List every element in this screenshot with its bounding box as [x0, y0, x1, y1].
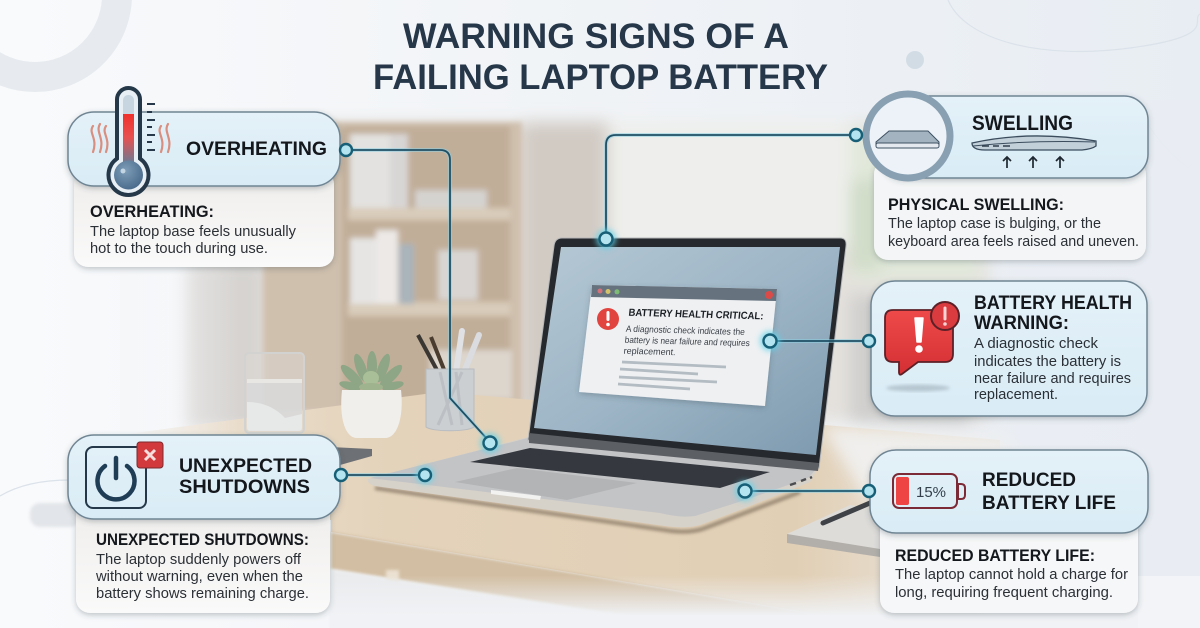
shutdowns description: without warning, even when the [95, 569, 303, 585]
reduced life header label: BATTERY LIFE [982, 492, 1116, 514]
swelling description: The laptop case is bulging, or the [888, 216, 1101, 232]
panel: swelling [866, 94, 1148, 260]
swelling header [880, 96, 1148, 178]
window text: A diagnostic check indicates the [625, 324, 745, 337]
window text: BATTERY HEALTH CRITICAL: [628, 308, 764, 322]
decorative corner ring [0, 0, 117, 77]
window placeholder lines [618, 362, 726, 389]
battery health description: replacement. [974, 387, 1058, 403]
icon: red x badge [137, 442, 163, 468]
icon: warning speech bubble [885, 302, 959, 392]
icon: thermometer [108, 88, 155, 195]
connector lines [346, 135, 864, 491]
connector: reduced life [751, 489, 864, 493]
shutdowns description: UNEXPECTED SHUTDOWNS: [96, 531, 309, 549]
window text [623, 308, 764, 359]
overheating description: OVERHEATING: [90, 203, 214, 221]
window buttons [598, 288, 773, 299]
overheating description: The laptop base feels unusually [90, 224, 297, 240]
laptop base lip [368, 437, 818, 527]
shutdowns header label: UNEXPECTED [179, 455, 312, 477]
swelling description [888, 196, 1139, 250]
icon: upward arrows [1003, 157, 1064, 168]
window text: replacement. [623, 346, 676, 357]
reduced life header label: REDUCED [982, 469, 1076, 491]
shutdowns header [68, 435, 340, 519]
panel: reduced battery life [870, 450, 1148, 613]
window title bar [591, 285, 777, 301]
desk top [120, 392, 1000, 628]
shutdowns header label: SHUTDOWNS [179, 476, 310, 498]
battery health description: A diagnostic check [974, 336, 1099, 352]
window alert icon [597, 308, 619, 330]
connector: overheating [352, 150, 488, 440]
reduced life header label [982, 469, 1116, 514]
icon: swollen laptop [972, 136, 1096, 150]
shutdowns description card [76, 500, 330, 613]
bookshelf [263, 122, 522, 412]
succulent plant [338, 351, 405, 438]
connector: shutdowns [346, 473, 420, 477]
connector node glows [416, 229, 780, 501]
screen alert window [579, 285, 777, 406]
laptop keyboard [470, 448, 770, 488]
reduced life description: long, requiring frequent charging. [895, 585, 1113, 601]
reduced life header [870, 450, 1148, 533]
right-side tablet and pen [787, 503, 900, 557]
icon: normal laptop in ring [866, 94, 950, 178]
closed notebook under left card [330, 447, 372, 465]
battery health heading [974, 292, 1132, 334]
laptop deck [370, 438, 818, 517]
window body [579, 285, 777, 406]
battery health heading: WARNING: [974, 312, 1069, 334]
desk pale far corner [820, 425, 1010, 520]
battery health heading: BATTERY HEALTH [974, 292, 1132, 314]
swelling description card [874, 160, 1146, 260]
decorative smudge [30, 503, 80, 527]
overheating header [68, 112, 340, 186]
overheating description [90, 203, 297, 257]
ports [790, 477, 812, 485]
reduced life description [895, 547, 1128, 601]
shutdowns header label [179, 455, 312, 498]
title: FAILING LAPTOP BATTERY [373, 58, 828, 97]
reduced life description: The laptop cannot hold a charge for [895, 567, 1128, 583]
panel: battery health warning [871, 281, 1147, 416]
connector: battery health [776, 339, 864, 343]
back wall and curtains [185, 122, 990, 430]
connector nodes [335, 129, 875, 498]
icon: heat waves [92, 124, 169, 152]
overheating description card [74, 170, 334, 267]
icon: low battery: 15% [916, 484, 946, 501]
swelling description: PHYSICAL SWELLING: [888, 196, 1064, 214]
laptop lid [528, 238, 846, 468]
shutdowns description [95, 531, 309, 602]
decorative thin arcs [0, 0, 1200, 496]
laptop screen [534, 247, 840, 455]
connector: swelling [606, 135, 850, 234]
reduced life description: REDUCED BATTERY LIFE: [895, 547, 1095, 565]
laptop trackpad [455, 468, 637, 500]
laptop shadow [375, 488, 800, 532]
laptop [368, 238, 846, 532]
window text: battery is near failure and requires [624, 335, 751, 348]
water glass [245, 353, 304, 433]
pen holder [418, 331, 479, 431]
panel: unexpected shutdowns [68, 435, 340, 613]
panel: overheating [68, 88, 340, 267]
shutdowns description: battery shows remaining charge. [96, 586, 309, 602]
title [373, 17, 828, 97]
desk front edge [331, 532, 900, 628]
battery health description [974, 336, 1131, 403]
overheating header label: OVERHEATING [186, 138, 327, 160]
battery health description: near failure and requires [974, 371, 1131, 387]
room scene [120, 100, 1200, 628]
swelling header label: SWELLING [972, 112, 1073, 135]
battery health card [871, 281, 1147, 416]
swelling description: keyboard area feels raised and uneven. [888, 234, 1139, 250]
laptop hinge [529, 433, 819, 471]
title: WARNING SIGNS OF A [403, 17, 789, 56]
trackpad notch [491, 490, 541, 500]
overheating description: hot to the touch during use. [90, 241, 268, 257]
shutdowns description: The laptop suddenly powers off [96, 552, 302, 568]
fades to page background [120, 100, 1200, 628]
reduced life description card [880, 515, 1138, 613]
battery health description: indicates the battery is [974, 354, 1121, 370]
icon: power symbol [86, 447, 146, 508]
decorative dot [906, 51, 924, 69]
icon: low battery [893, 474, 965, 508]
